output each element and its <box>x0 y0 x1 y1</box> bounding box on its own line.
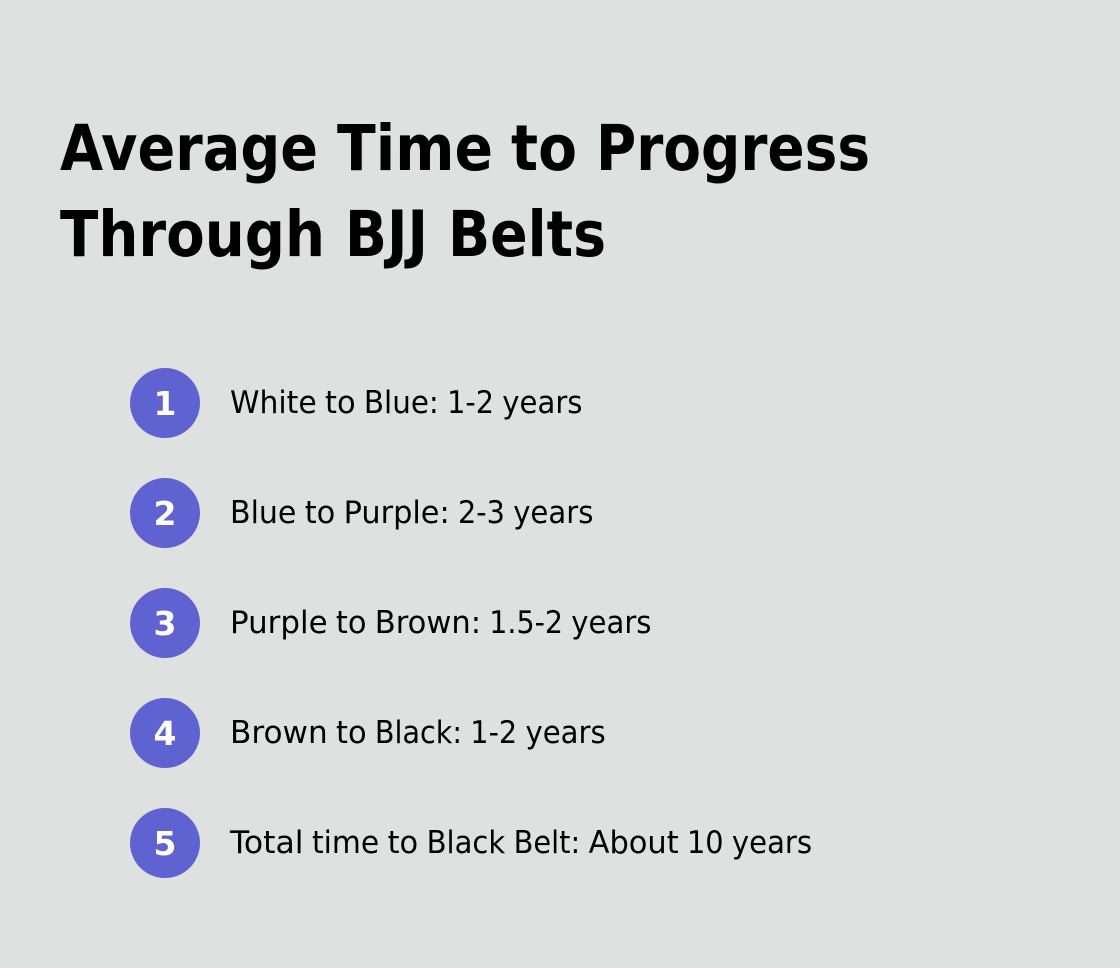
step 1: to <box>325 385 356 421</box>
step 5: Belt: <box>514 825 580 861</box>
step 1: 1 <box>154 384 176 423</box>
step 5: 5 <box>154 824 176 863</box>
title <box>60 112 870 271</box>
step 4: 4 <box>154 714 176 753</box>
step 5: years <box>732 825 812 861</box>
step 5: Black <box>427 825 505 861</box>
step 4: Brown <box>230 715 328 751</box>
step 1: Blue: <box>364 385 439 421</box>
title: Progress <box>596 112 870 185</box>
step 3: Brown: <box>375 605 481 641</box>
step 1: years <box>502 385 582 421</box>
step 4: years <box>526 715 606 751</box>
list: belt progression steps <box>130 368 812 878</box>
step 5: to <box>388 825 418 861</box>
step 2: Purple: <box>344 495 450 531</box>
title: Average <box>60 112 318 185</box>
step 1 <box>130 368 582 438</box>
step 4 <box>130 698 606 768</box>
step 3: 1.5-2 <box>489 605 563 641</box>
title: Time <box>337 112 493 185</box>
step 3: 3 <box>154 604 176 643</box>
step 4: Black: <box>375 715 462 751</box>
step 5: Total <box>229 825 304 861</box>
title: BJJ <box>345 198 428 271</box>
step 2: years <box>513 495 593 531</box>
step 3 <box>130 588 652 658</box>
step 2: Blue <box>230 495 296 531</box>
step 4: to <box>336 715 367 751</box>
title: Through <box>60 198 325 271</box>
step 5: About <box>589 825 679 861</box>
step 1: 1-2 <box>447 385 494 421</box>
step 2 <box>130 478 593 548</box>
step 5 <box>130 808 812 878</box>
step 2: 2-3 <box>458 495 505 531</box>
step 3: Purple <box>230 605 328 641</box>
step 5: time <box>312 825 379 861</box>
step 2: 2 <box>154 494 176 533</box>
step 3: years <box>571 605 652 641</box>
step 5: 10 <box>687 825 724 861</box>
step 3: to <box>336 605 366 641</box>
step 2: to <box>305 495 335 531</box>
title: to <box>511 112 577 185</box>
step 4: 1-2 <box>470 715 517 751</box>
step 1: White <box>230 385 317 421</box>
title: Belts <box>448 198 606 271</box>
